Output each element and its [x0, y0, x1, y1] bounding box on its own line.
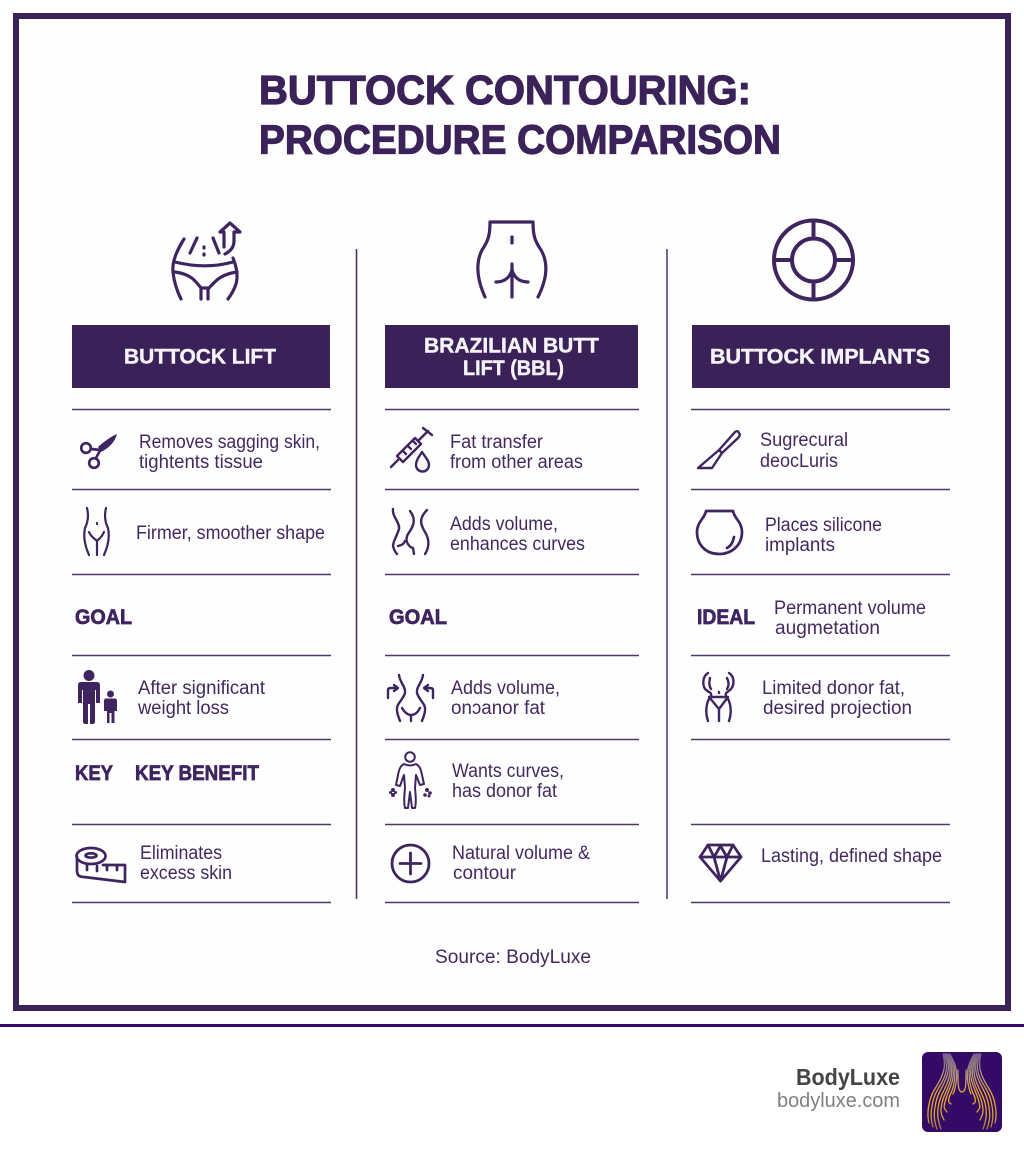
label: key benefit: KEY BENEFIT — [135, 762, 259, 785]
icon: scalpel — [698, 431, 740, 468]
title: PROCEDURE COMPARISON — [259, 116, 781, 162]
row: removes sagging skin — [81, 432, 320, 473]
icon: buttocks — [478, 222, 546, 297]
icon: lifted hips with arrow — [173, 223, 240, 299]
row: eliminates excess skin — [76, 843, 232, 884]
row: natural volume: Natural volume & — [452, 843, 590, 864]
heading: buttock implants: BUTTOCK IMPLANTS — [710, 346, 930, 368]
row: places silicone implants: implants — [765, 535, 835, 556]
row: firmer shape — [84, 508, 325, 555]
row: after weight loss: weight loss — [137, 698, 229, 719]
icon: diamond — [700, 845, 741, 881]
row: natural volume: contour — [453, 863, 517, 884]
row: places silicone implants: Places silicone — [765, 515, 882, 536]
row: wants curves: Wants curves, — [452, 761, 564, 782]
row: limited donor fat: Limited donor fat, — [762, 678, 905, 699]
row: removes sagging skin: Removes sagging skin, — [139, 432, 320, 453]
row: places silicone implants — [697, 511, 882, 556]
source note: Source: BodyLuxe — [435, 947, 591, 968]
title: BUTTOCK CONTOURING: — [259, 67, 751, 113]
icon: hips with arrows — [388, 675, 433, 721]
label: goal: GOAL — [389, 606, 447, 629]
row: fat transfer — [391, 428, 583, 473]
heading: buttock lift: BUTTOCK LIFT — [124, 346, 276, 368]
footer brand: bodyluxe.com — [777, 1090, 900, 1112]
row: fat transfer: Fat transfer — [450, 432, 544, 453]
row: surgical procedure: Sugrecural — [760, 430, 848, 451]
row: adds volume donor fat — [388, 675, 560, 721]
panel: brazilian butt lift — [385, 222, 639, 902]
heading: buttock implants — [692, 325, 950, 388]
row: wants curves: has donor fat — [452, 781, 558, 802]
label: key benefit — [75, 762, 259, 785]
row: ideal permanent volume: augmetation — [775, 618, 880, 639]
row: adds volume enhances curves — [393, 509, 585, 555]
row: ideal permanent volume: IDEAL — [697, 606, 755, 629]
row: limited donor fat: desired projection — [763, 698, 912, 719]
row: fat transfer: from other areas — [450, 452, 583, 473]
icon: measuring tape — [76, 848, 125, 882]
row: ideal permanent volume — [697, 598, 926, 639]
row: surgical procedure: deocLuris — [760, 451, 838, 472]
icon: figure with flowers — [389, 752, 432, 808]
icon: scissors — [81, 434, 117, 468]
label: key benefit: KEY — [75, 762, 113, 785]
panel: buttock lift — [72, 223, 331, 902]
icon: syringe and drop — [391, 428, 432, 472]
heading: brazilian butt lift: LIFT (BBL) — [463, 357, 564, 380]
row: firmer shape: Firmer, smoother shape — [136, 523, 325, 544]
icon: body with hips — [703, 673, 733, 721]
row: eliminates excess skin: Eliminates — [140, 843, 222, 864]
row: adds volume enhances curves: Adds volume, — [450, 514, 558, 535]
row: adds volume donor fat: onɔanor fat — [451, 698, 546, 719]
row: limited donor fat — [703, 673, 912, 721]
row: removes sagging skin: tightents tissue — [139, 452, 263, 473]
icon: torso — [84, 508, 109, 555]
footer brand — [777, 1064, 900, 1112]
icon: plus in circle — [392, 845, 429, 882]
panel: buttock implants — [691, 220, 950, 902]
footer brand: BodyLuxe — [796, 1064, 900, 1090]
heading: brazilian butt lift: BRAZILIAN BUTT — [424, 334, 599, 358]
icon: ring implant — [774, 220, 853, 300]
row: after weight loss: After significant — [138, 678, 266, 699]
icon: curves — [393, 509, 428, 554]
row: lasting defined shape — [700, 845, 942, 881]
title — [259, 67, 781, 162]
heading: buttock lift — [72, 325, 330, 388]
row: after weight loss — [78, 670, 266, 724]
row: ideal permanent volume: Permanent volume — [774, 598, 926, 619]
row: wants curves — [389, 752, 564, 808]
label: goal: GOAL — [75, 606, 132, 629]
logo — [922, 1052, 1002, 1132]
icon: adult and child — [78, 670, 117, 724]
row: surgical procedure — [698, 430, 848, 472]
row: adds volume enhances curves: enhances curves — [450, 534, 585, 555]
row: natural volume — [392, 843, 590, 884]
row: eliminates excess skin: excess skin — [140, 863, 232, 884]
icon: silicone implant — [697, 511, 742, 554]
heading: brazilian butt lift — [385, 325, 638, 388]
row: lasting defined shape: Lasting, defined shape — [761, 846, 942, 867]
row: adds volume donor fat: Adds volume, — [451, 678, 560, 699]
